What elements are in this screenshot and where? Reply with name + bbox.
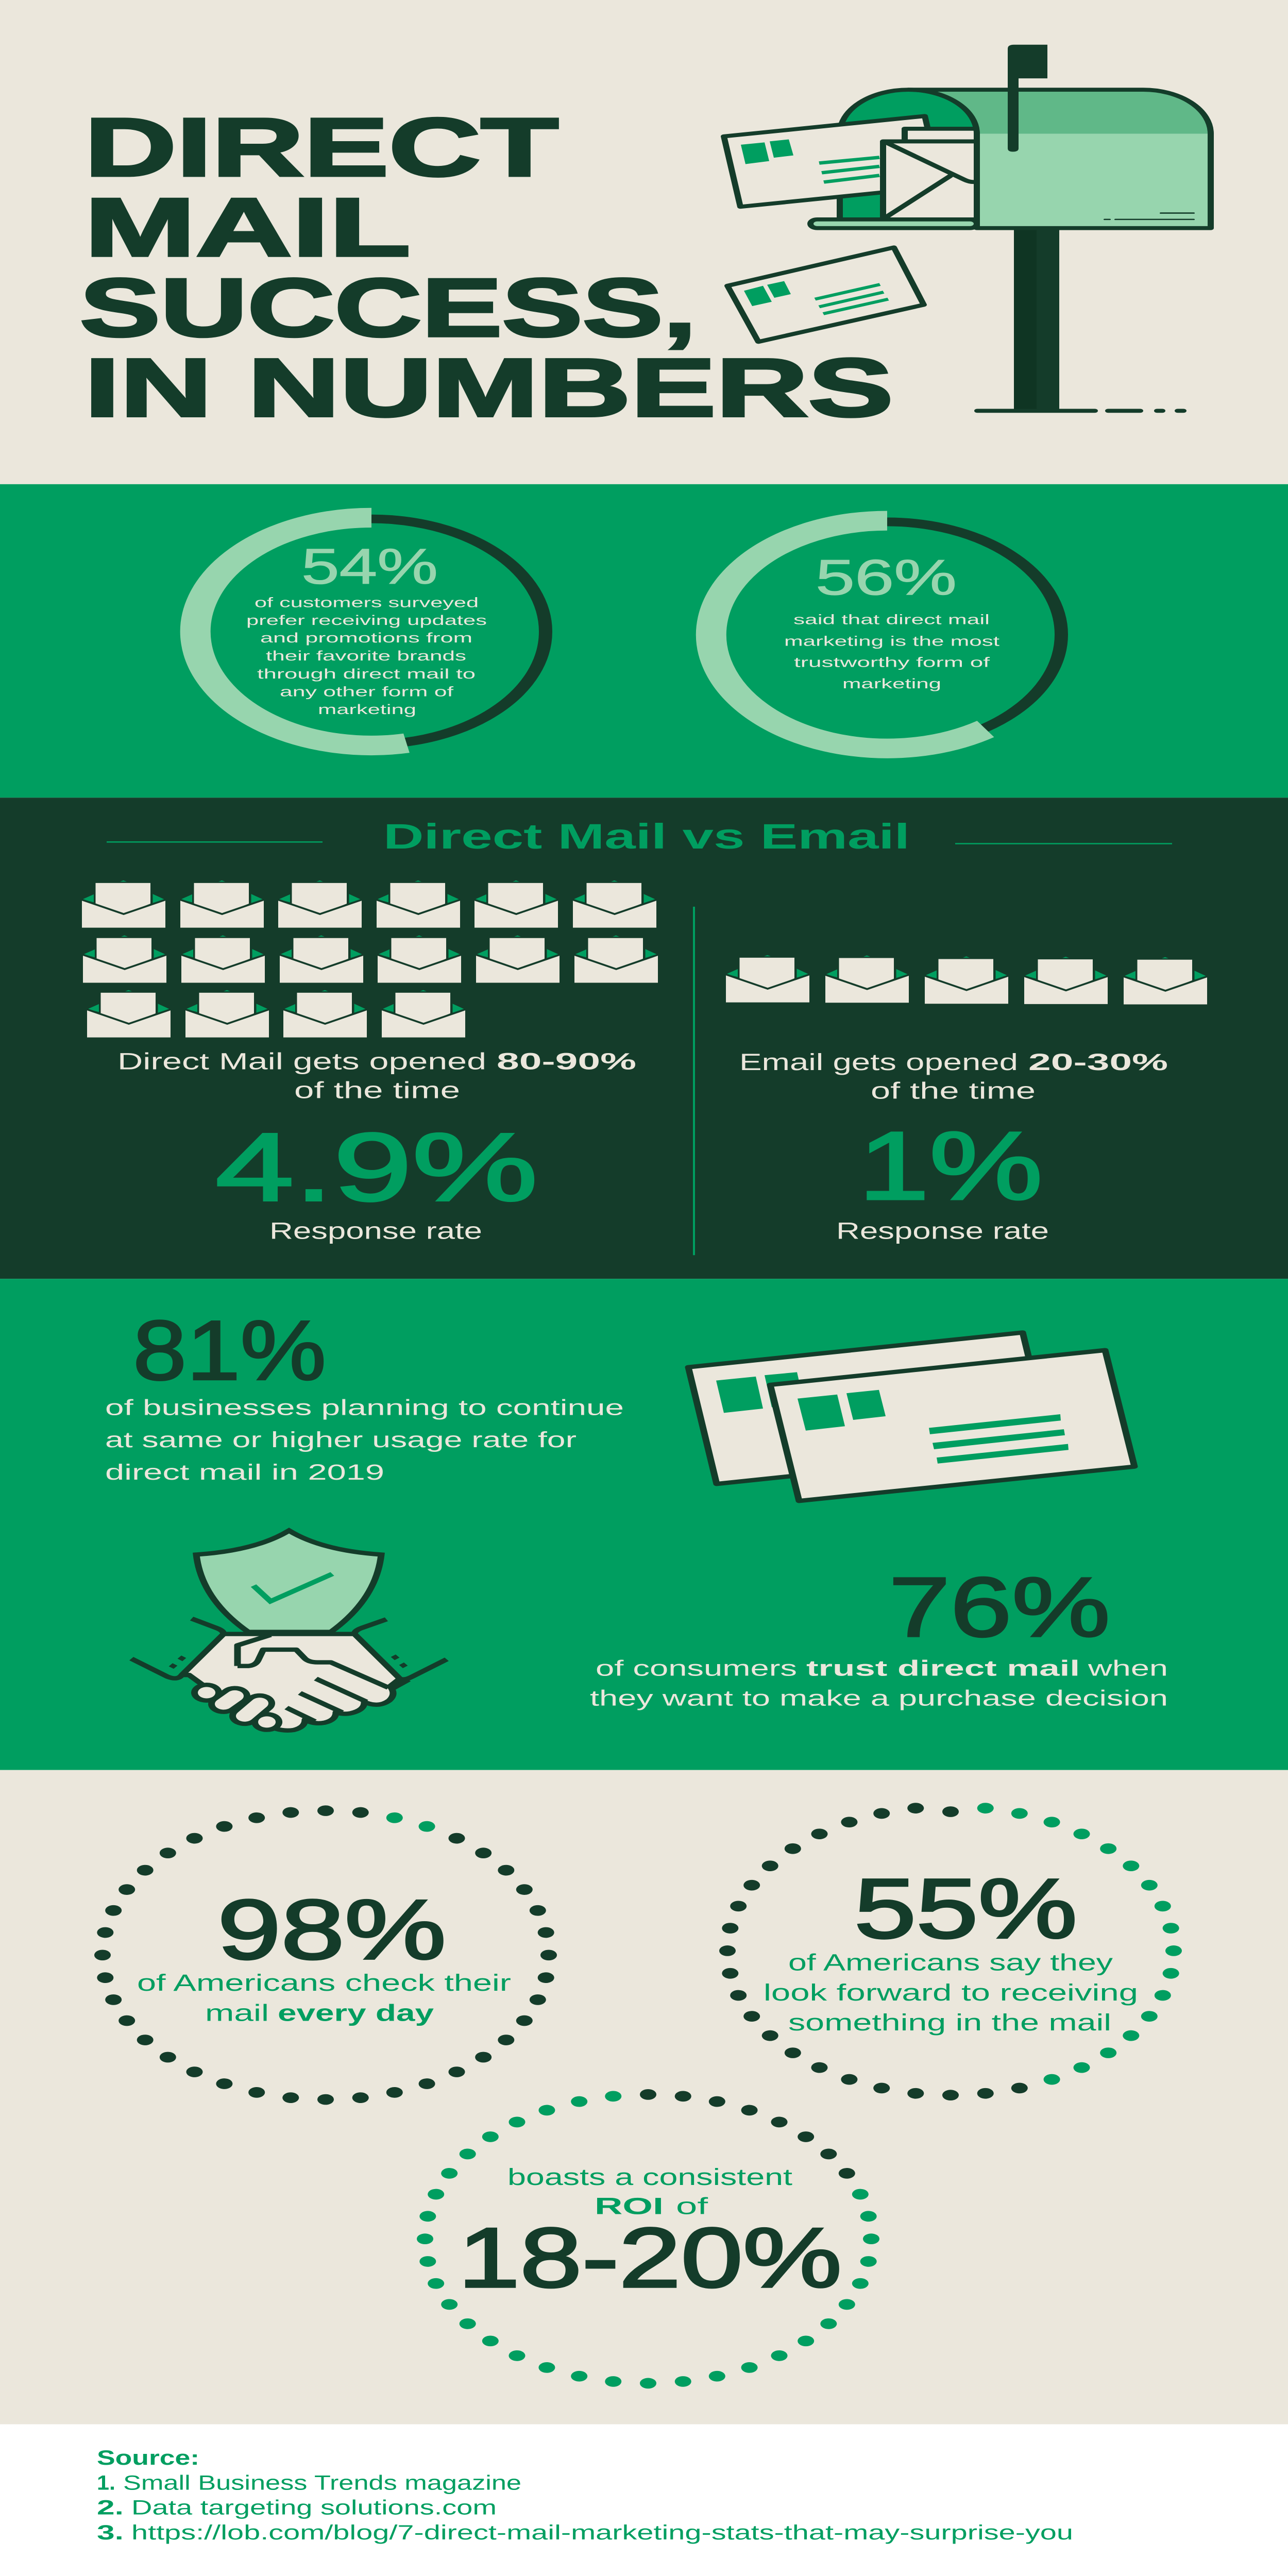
panel: beige dotted circles xyxy=(0,1770,1288,2425)
text: email open rate xyxy=(739,1049,1168,1104)
panel: green stats rings xyxy=(0,484,1288,798)
text: email open rate: of the time xyxy=(871,1078,1036,1104)
text: 81 percent description: at same or higher usage rate for xyxy=(105,1428,577,1452)
icon: mailbox flag xyxy=(1008,45,1047,151)
text: 76 percent description: when xyxy=(1088,1656,1168,1681)
text: 54 percent description: their favorite brands xyxy=(266,648,466,664)
text: ROI description: of xyxy=(676,2194,708,2219)
text: direct mail open rate: 80-90% xyxy=(497,1049,636,1075)
text: source list: Small Business Trends magazine xyxy=(123,2471,521,2495)
stat: 18-20 percent: 18-20% xyxy=(458,2211,842,2305)
text: direct mail open rate xyxy=(117,1049,636,1103)
text: 81 percent description: of businesses planning to continue xyxy=(105,1395,624,1419)
text: source list: 1. xyxy=(97,2471,115,2495)
text: ROI description: ROI xyxy=(595,2194,664,2219)
icon: mailbox opening xyxy=(840,90,977,220)
icon: shield and handshake xyxy=(131,1531,447,1731)
icon group: direct mail envelopes xyxy=(82,880,658,1038)
icon: mailbox xyxy=(724,45,1211,413)
stat: direct mail response rate: 4.9% xyxy=(215,1113,538,1221)
label: response rate left: Response rate xyxy=(269,1218,482,1244)
heading: source: Source: xyxy=(97,2446,199,2469)
text: direct mail open rate: Direct Mail gets opened xyxy=(117,1049,486,1075)
text: 54 percent description: of customers surveyed xyxy=(255,595,479,611)
text: 76 percent description: trust direct mail xyxy=(806,1656,1080,1681)
stat: 55 percent: 55% xyxy=(854,1861,1077,1956)
text: email open rate: Email gets opened xyxy=(739,1049,1018,1075)
title: IN NUMBERS xyxy=(84,342,893,434)
title xyxy=(80,101,893,434)
text: 56 percent description xyxy=(784,612,999,691)
text: direct mail open rate: of the time xyxy=(294,1077,460,1103)
icon: mailbox post xyxy=(974,228,1187,413)
icon: front postcard xyxy=(770,1350,1134,1501)
text: 76 percent description: of consumers xyxy=(596,1656,797,1681)
stat: 56 percent: 56% xyxy=(816,549,957,605)
text: 56 percent description: marketing is the most xyxy=(784,634,999,649)
heading: direct mail vs email: Direct Mail vs Email xyxy=(383,817,910,856)
text: source list: 3. xyxy=(97,2521,124,2544)
text: source list xyxy=(97,2471,1073,2544)
stat: 98 percent: 98% xyxy=(217,1883,446,1977)
text: 56 percent description: trustworthy form of xyxy=(794,655,990,670)
icon group: email envelopes xyxy=(726,955,1207,1005)
chart: 56 percent ring xyxy=(711,521,1061,749)
text: 56 percent description: marketing xyxy=(842,676,941,691)
icon: shield xyxy=(196,1531,381,1632)
text: 98 percent description: every day xyxy=(278,2000,434,2026)
text: 98 percent description xyxy=(137,1970,511,2026)
text: 76 percent description xyxy=(590,1656,1168,1710)
title: DIRECT xyxy=(84,101,558,194)
text: ROI description xyxy=(507,2164,792,2219)
panel: direct mail vs email xyxy=(0,798,1288,1279)
text: 55 percent description: of Americans say they xyxy=(788,1950,1113,1976)
text: 81 percent description: direct mail in 2019 xyxy=(105,1460,384,1484)
text: 56 percent description: said that direct mail xyxy=(793,612,990,628)
panel: green business and consumer stats xyxy=(0,1279,1288,1770)
text: 98 percent description: of Americans check their xyxy=(137,1970,511,1996)
title: SUCCESS, xyxy=(80,262,697,354)
text: source list: https://lob.com/blog/7-direct-mail-marketing-stats-that-may-surprise-you xyxy=(131,2521,1073,2544)
text: 54 percent description: any other form of xyxy=(280,684,453,700)
text: 81 percent description xyxy=(105,1395,624,1484)
text: 98 percent description: mail xyxy=(205,2000,269,2026)
text: ROI description: boasts a consistent xyxy=(507,2164,792,2190)
stat: email response rate: 1% xyxy=(858,1112,1043,1219)
text: source list: 2. xyxy=(97,2496,124,2519)
icon: handshake xyxy=(131,1619,447,1731)
chart: 98 percent dotted ring xyxy=(94,1805,557,2105)
chart: 55 percent dotted ring xyxy=(719,1802,1182,2100)
text: 55 percent description: something in the mail xyxy=(788,2010,1111,2036)
title: MAIL xyxy=(84,181,411,274)
icon: mailbox body xyxy=(908,90,1211,228)
text: 54 percent description xyxy=(246,595,487,717)
chart: ROI dotted ring xyxy=(417,2089,879,2388)
icon: back postcard xyxy=(688,1332,1051,1484)
stat: 76 percent: 76% xyxy=(889,1560,1110,1654)
stat: 81 percent: 81% xyxy=(133,1303,326,1398)
text: 54 percent description: and promotions from xyxy=(260,630,472,646)
text: 76 percent description: they want to make a purchase decision xyxy=(590,1686,1168,1710)
text: 54 percent description: through direct mail to xyxy=(257,666,476,682)
chart: 54 percent ring xyxy=(195,518,546,745)
stat: 54 percent: 54% xyxy=(301,538,438,594)
text: source list: Data targeting solutions.com xyxy=(131,2496,497,2519)
text: 55 percent description xyxy=(764,1950,1138,2036)
icon: mailbox tray xyxy=(810,219,977,228)
text: 54 percent description: prefer receiving updates xyxy=(246,613,487,628)
icon: falling letter xyxy=(727,247,924,342)
icon: envelope in mailbox xyxy=(883,141,977,219)
panel: source footer xyxy=(0,2425,1288,2576)
text: 55 percent description: look forward to receiving xyxy=(764,1980,1138,2006)
label: response rate right: Response rate xyxy=(836,1218,1049,1244)
panel: header xyxy=(0,0,1288,484)
icon: two postcards xyxy=(688,1332,1134,1501)
text: email open rate: 20-30% xyxy=(1028,1049,1168,1075)
icon: back paper xyxy=(905,129,977,149)
text: 54 percent description: marketing xyxy=(318,702,416,717)
icon: letter sticking out xyxy=(724,116,941,207)
